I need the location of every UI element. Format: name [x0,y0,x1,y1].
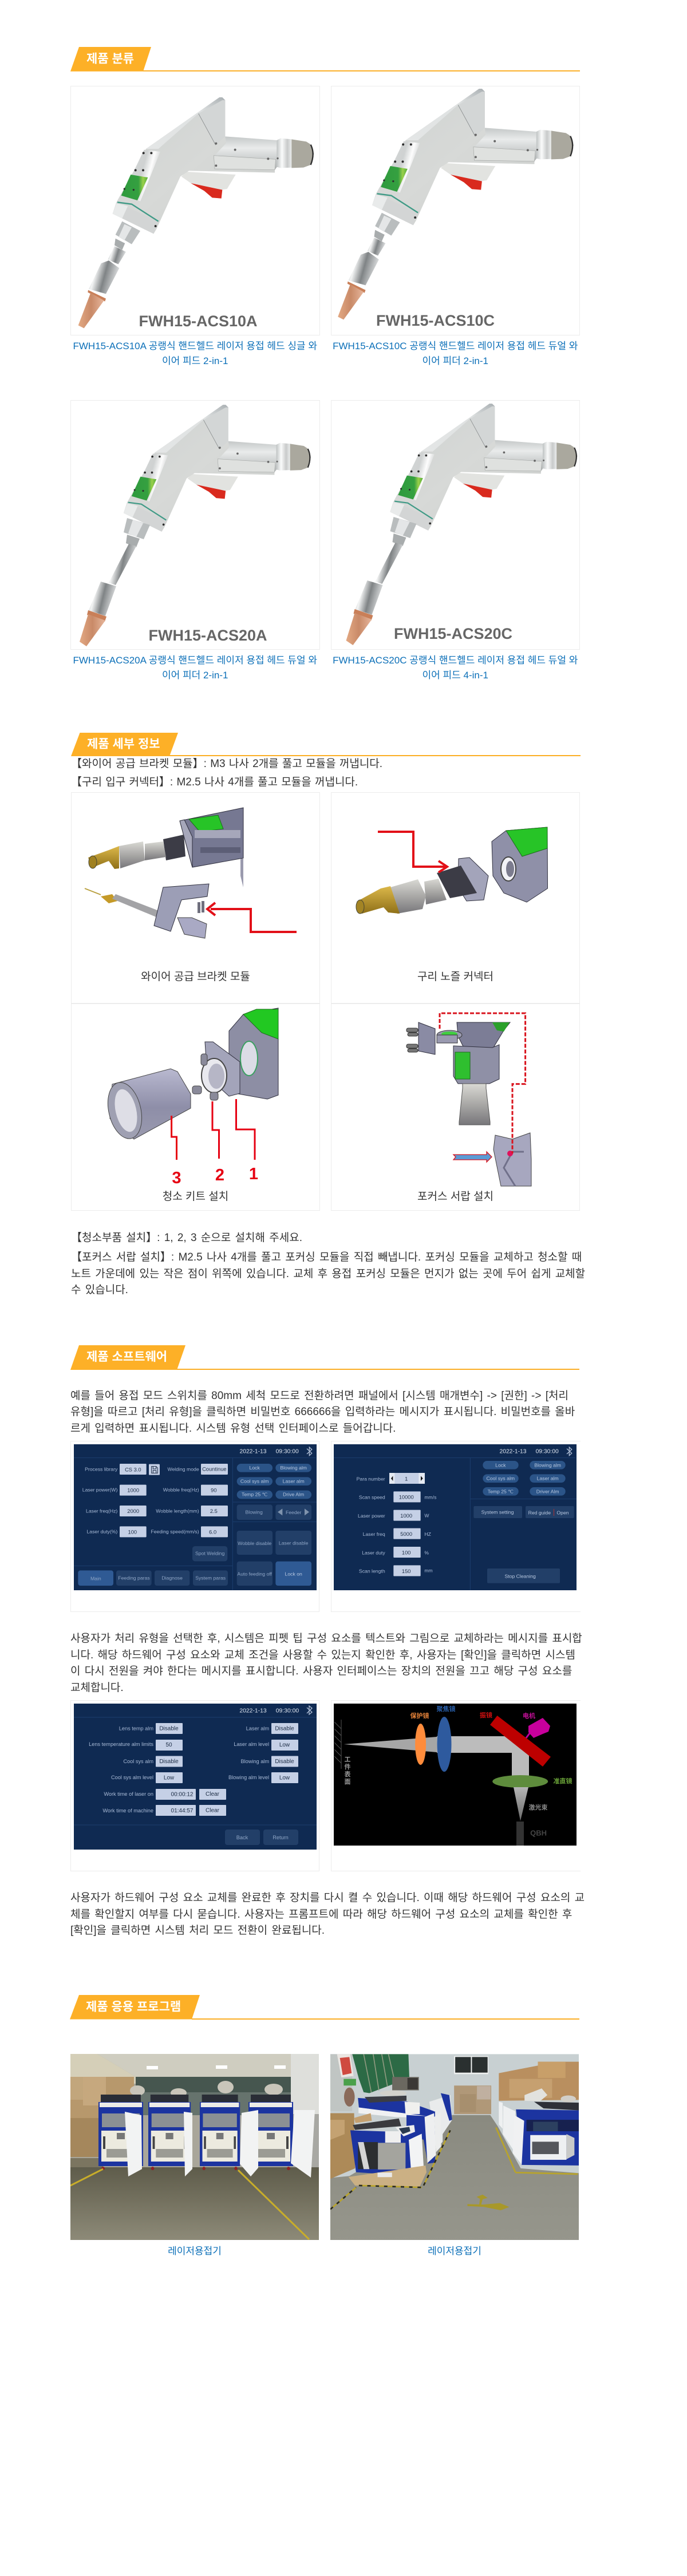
text block: hardware replacement [70,1890,586,1939]
caption: 레이저용접기 [168,2246,222,2257]
text block: software intro: 유형]을 따르고 [처리 유형]을 클릭하면 비밀번호 666666을 입력하라는 메시지가 표시됩니다. 비밀번호를 올바 [70,1406,575,1418]
screen: alarm settings UI: Work time of laser on [104,1791,153,1797]
application card: aisle view of machines [330,2054,579,2260]
screen: alarm settings UI: Clear [206,1791,220,1797]
panel: alarm settings screen [70,1700,319,1871]
screen: cleaning parameters UI: 5000 [400,1531,412,1537]
screen: alarm settings UI: 50 [165,1742,172,1748]
screen: cleaning parameters UI: Para number [357,1476,385,1481]
product image: ACS10A welding head: FWH15-ACS10A [139,313,258,330]
panel: cleaning kit install [71,1003,320,1211]
screen: main parameters UI: Laser freq(Hz) [86,1508,117,1514]
screen: main parameters UI: CS 3.0 [125,1467,141,1472]
illustration: cleaning kit exploded view: 1 [249,1165,258,1183]
screen: cleaning parameters UI: 09:30:00 [536,1448,559,1455]
screen: alarm settings UI: Disable [159,1759,179,1765]
screen: main parameters UI: 2000 [127,1508,139,1514]
text block: focus drawer notes: 수 있습니다. [71,1284,128,1296]
caption: 와이어 공급 브라켓 모듈 [141,971,250,983]
diagram: laser optical path: 件 [345,1763,350,1771]
arrow: red indicator [207,903,297,932]
text block: focus drawer notes: 【포커스 서랍 설치】: M2.5 나사 4개를 풀고 포커싱 모듈을 직접 빼냅니다. 포커싱 모듈을 교체하고 청소할 때 [71,1251,582,1263]
screen: main parameters UI: Main [90,1575,101,1581]
screen: alarm settings UI: 01:44:57 [171,1808,194,1814]
heading: 제품 응용 프로그램 [0,1989,687,2024]
photo: four welders in workshop [70,2054,319,2240]
screen: alarm settings UI: Return [273,1835,289,1840]
screen: alarm settings UI: 00:00:12 [171,1792,194,1797]
screen: main parameters UI: Wobble freq(Hz) [163,1487,199,1492]
screen: alarm settings UI: Blowing alm level [228,1775,269,1780]
screen: main parameters UI: Laser disable [279,1540,309,1546]
caption: ACS20C: FWH15-ACS20C 공랭식 핸드헬드 레이저 용접 헤드 듀얼 와 [333,655,578,666]
photo: welders along warehouse aisle [330,2054,579,2240]
heading: 제품 분류 [70,47,580,72]
screen: alarm settings UI: Lens temperature alm limits [89,1741,153,1747]
text block: tip replacement: 니다. 해당 하드웨어 구성 요소와 교체 조건을 사용할 수 있는지 확인한 후, 사용자는 [확인]을 클릭하면 시스템 [70,1649,575,1661]
illustration: cleaning kit exploded view [71,1003,320,1190]
diagram: laser optical path: QBH [530,1828,547,1838]
caption: ACS20A [73,655,317,681]
screen: alarm settings UI: Laser alm level [234,1741,269,1747]
heading: 제품 세부 정보 [71,733,581,756]
screen: main parameters UI: Drive Alm [283,1492,304,1498]
diagram: laser optical path: 工 [345,1756,350,1763]
illustration: cleaning kit exploded view: 3 [172,1169,181,1187]
screen: main parameters UI: Wobble length(mm) [156,1508,199,1514]
screen: alarm settings UI: Low [164,1775,175,1781]
panel: optical path diagram [331,1700,580,1871]
screen: main parameters UI: 1000 [127,1487,139,1493]
screen: cleaning parameters UI: Laser alm [537,1476,559,1481]
screen: main parameters UI: Lock on [285,1571,302,1577]
screen: alarm settings UI: Disable [159,1725,179,1732]
screen: cleaning parameters UI: HZ [424,1531,432,1537]
illustration: cleaning kit exploded view: 2 [215,1166,224,1184]
illustration: focus drawer with dashed leader [331,1003,580,1190]
screen: main parameters UI: 2.5 [210,1508,218,1514]
caption: ACS10C: 이어 피더 2-in-1 [423,355,488,366]
screen: cleaning parameters UI: Laser freq [363,1531,385,1537]
screen: cleaning parameters UI: Laser duty [362,1550,385,1555]
heading: 제품 소프트웨어 [0,1340,687,1374]
screen: main parameters UI: Wobble disable [238,1540,271,1546]
screen: cleaning parameters UI: System setting [481,1510,514,1515]
caption: 레이저용접기 [428,2246,481,2257]
caption: ACS10C: FWH15-ACS10C 공랭식 핸드헬드 레이저 용접 헤드 듀얼 와 [333,341,578,351]
caption: ACS20A: 이어 피더 2-in-1 [162,670,228,681]
text block: focus drawer notes [71,1250,586,1299]
illustration: connector exploded view with arrow [331,792,580,987]
caption: ACS10A: FWH15-ACS10A 공랭식 핸드헬드 레이저 용접 헤드 싱글 와 [73,341,317,351]
screen: main parameters UI: Feeding speed(mm/s) [151,1529,199,1535]
product image: ACS10C welding head [338,89,574,329]
screen: main parameters UI: Lock [250,1465,260,1471]
product image: ACS20A welding head: FWH15-ACS20A [148,627,267,644]
caption: ACS20A: FWH15-ACS20A 공랭식 핸드헬드 레이저 용접 헤드 듀얼 와 [73,655,317,666]
panel: focus drawer install [331,1003,580,1211]
screen: alarm settings UI: Disable [275,1725,294,1732]
screen: cleaning parameters UI: Red guide [528,1510,551,1515]
product image: ACS10C welding head: FWH15-ACS10C [376,312,495,329]
screen: main parameters UI: Feeding paras [118,1575,150,1581]
diagram: laser optical path: 聚焦镜 [436,1705,456,1713]
product image: ACS20A welding head [80,405,311,646]
screen: alarm settings UI: Laser alm [246,1725,269,1731]
panel: wire feed bracket module [71,792,320,1003]
diagram: laser optical path: 表 [345,1770,350,1778]
screen: main parameters UI: Auto feeding off [237,1571,273,1577]
screen: alarm settings UI: Disable [275,1759,294,1765]
caption: 청소 키트 설치 [163,1191,228,1203]
screen: alarm settings UI: Clear [206,1808,220,1814]
heading: 제품 소프트웨어: 제품 소프트웨어 [86,1350,167,1364]
text block: tip replacement [70,1631,586,1696]
text block: installation notes: 【청소부품 설치】: 1, 2, 3 순으로 설치해 주세요. [71,1232,302,1244]
screen: cleaning parameters UI: mm [424,1568,433,1574]
arrow: red indicator [378,832,447,872]
product card: FWH15-ACS20C [331,400,580,681]
screen: alarm settings UI: Low [279,1742,290,1748]
diagram: laser optical path: 保护镜 [410,1712,429,1720]
text block: software intro: 르게 입력하면 표시됩니다. 시스템 유형 선택 인터페이스로 들어갑니다. [70,1423,396,1435]
screen: cleaning parameters UI: Driver Alm [536,1488,559,1494]
screen: alarm settings UI: 09:30:00 [276,1708,299,1714]
text block: tip replacement: 교체합니다. [70,1682,124,1694]
screen: alarm settings UI: Cool sys alm [123,1759,153,1764]
callout lines: parts 1 2 3 [172,1099,255,1160]
screen: main parameters UI: 2022-1-13 [239,1448,267,1455]
screen: main parameters UI: System paras [195,1575,226,1581]
screen: alarm settings UI: Low [279,1775,290,1781]
product card: FWH15-ACS20A [70,400,320,681]
product card: FWH15-ACS10C [331,86,580,366]
heading: 제품 분류: 제품 분류 [86,53,134,65]
text block: tip replacement: 사용자가 처리 유형을 선택한 후, 시스템은 피펫 팁 구성 요소를 텍스트와 그림으로 교체하라는 메시지를 표시합 [70,1633,582,1645]
screen: main parameters UI: Diagnose [161,1575,183,1581]
heading: 제품 응용 프로그램: 제품 응용 프로그램 [86,2000,181,2014]
screen: cleaning parameters UI: Laser power [358,1513,385,1519]
caption: ACS10A [73,341,317,366]
screen: cleaning parameters UI: Scan speed [359,1494,385,1500]
screen: cleaning parameters UI: W [424,1513,429,1519]
screen: main parameters UI: Blowing [246,1510,263,1515]
product image: ACS10A welding head [78,97,314,330]
caption: 구리 노즐 커넥터 [417,971,493,983]
screen: cleaning parameters UI: 150 [402,1568,410,1574]
text block: software intro: 예를 들어 용접 모드 스위치를 80mm 세척 모드로 전환하려면 패널에서 [시스템 매개변수] -> [권한] -> [처리 [70,1390,568,1402]
text block: removal notes: 【구리 입구 커넥터】: M2.5 나사 4개를 풀고 모듈을 꺼냅니다. [71,776,358,788]
text block: removal notes [71,755,586,792]
text block: tip replacement: 이 다시 전원을 켜야 한다는 메시지를 표시합니다. 사용자 인터페이스는 장치의 전원을 끄고 해당 구성 요소를 [70,1665,572,1677]
screen: main parameters UI [74,1444,317,1590]
panel: copper nozzle connector [331,792,580,1003]
screen: main parameters UI: Feeder [286,1510,301,1515]
heading: 제품 세부 정보: 제품 세부 정보 [87,737,160,751]
screen: main parameters UI: Countinue [202,1467,227,1472]
illustration: bracket exploded view with arrow [71,792,320,987]
diagram: laser optical path: 准直镜 [553,1777,572,1785]
arrow: blue pointer [453,1152,492,1162]
diagram: laser optical path: 振镜 [480,1711,492,1719]
screen: cleaning parameters UI: % [424,1550,429,1555]
screen: cleaning parameters UI: Cool sys alm [487,1476,515,1481]
dashed leader line [440,1013,526,1153]
screen: main parameters UI: Laser power(W) [82,1487,117,1492]
diagram: laser optical path: 电机 [523,1712,535,1720]
diagram: laser optical path: 面 [345,1778,350,1785]
text block: removal notes: 【와이어 공급 브라켓 모듈】: M3 나사 2개를 풀고 모듈을 꺼냅니다. [71,758,382,770]
screen: main parameters UI: 100 [128,1529,137,1535]
screen: cleaning parameters UI: 1000 [400,1513,412,1519]
screen: cleaning parameters UI: Lock [495,1462,506,1468]
screen: cleaning parameters UI [334,1444,577,1590]
screen: alarm settings UI: Work time of machine [102,1808,153,1814]
screen: main parameters UI: Welding mode [167,1467,199,1472]
screen: cleaning parameters UI: mm/s [424,1494,437,1500]
screen: main parameters UI: 09:30:00 [276,1448,299,1455]
screen: alarm settings UI [74,1704,317,1850]
text block: hardware replacement: 체를 확인할지 여부를 다시 묻습니다. 사용자는 프롬프트에 따라 해당 하드웨어 구성 요소의 교체를 확인한 후 [70,1909,572,1921]
text block: hardware replacement: [확인]을 클릭하면 시스템 처리 모드 전환이 완료됩니다. [70,1925,325,1937]
screen: alarm settings UI: Blowing alm [240,1759,269,1764]
product image: ACS20C welding head: FWH15-ACS20C [393,625,512,642]
screen: main parameters UI: 6.0 [209,1529,216,1535]
screen: cleaning parameters UI: 1 [405,1476,408,1481]
product card: FWH15-ACS10A [70,86,320,366]
screen: alarm settings UI: 2022-1-13 [239,1708,267,1714]
screen: main parameters UI: Laser alm [283,1478,305,1484]
screen: main parameters UI: Spot Welding [195,1551,225,1556]
text block: hardware replacement: 사용자가 하드웨어 구성 요소 교체를 완료한 후 장치를 다시 켤 수 있습니다. 이때 해당 하드웨어 구성 요소의 교 [70,1892,585,1904]
caption: ACS20C: 이어 피드 4-in-1 [423,670,488,681]
screen: cleaning parameters UI: Open [556,1510,569,1515]
caption: 포커스 서랍 설치 [417,1191,493,1203]
panel: main control screen [70,1441,319,1612]
caption: ACS10A: 이어 피드 2-in-1 [162,355,228,366]
caption: ACS20C [333,655,578,681]
screen: main parameters UI: Temp 25 ℃ [242,1492,268,1498]
screen: main parameters UI: Process library [85,1467,118,1472]
screen: alarm settings UI: Back [236,1835,248,1840]
screen: alarm settings UI: Cool sys alm level [111,1775,153,1780]
screen: cleaning parameters UI: Blowing alm [534,1462,561,1468]
text block: focus drawer notes: 노트 가운데에 있는 작은 점이 위쪽에 있습니다. 교체 후 용접 포커싱 모듈은 먼지가 없는 곳에 두어 쉽게 교체할 [71,1268,585,1280]
screen: cleaning parameters UI: Scan length [359,1568,385,1574]
screen: cleaning parameters UI: Stop Cleaning [504,1574,536,1579]
screen: main parameters UI: Laser duty(%) [86,1529,117,1535]
screen: main parameters UI: 90 [211,1487,217,1493]
screen: cleaning parameters UI: Temp 25 ℃ [488,1488,514,1494]
screen: main parameters UI: Cool sys alm [240,1478,269,1484]
screen: cleaning parameters UI: 100 [402,1550,410,1555]
diagram: laser optical path [334,1704,577,1846]
screen: cleaning parameters UI: 10000 [399,1495,414,1500]
panel: cleaning control screen [331,1441,580,1612]
screen: alarm settings UI: Lens temp alm [119,1725,153,1731]
product image: ACS20C welding head [346,404,577,645]
screen: cleaning parameters UI: 2022-1-13 [499,1448,527,1455]
diagram: laser optical path: 激光束 [529,1803,547,1811]
screen: main parameters UI: Blowing alm [280,1465,307,1471]
application card: front view of machines [70,2054,319,2260]
caption: ACS10C [333,341,578,366]
text block: software intro [70,1388,586,1437]
